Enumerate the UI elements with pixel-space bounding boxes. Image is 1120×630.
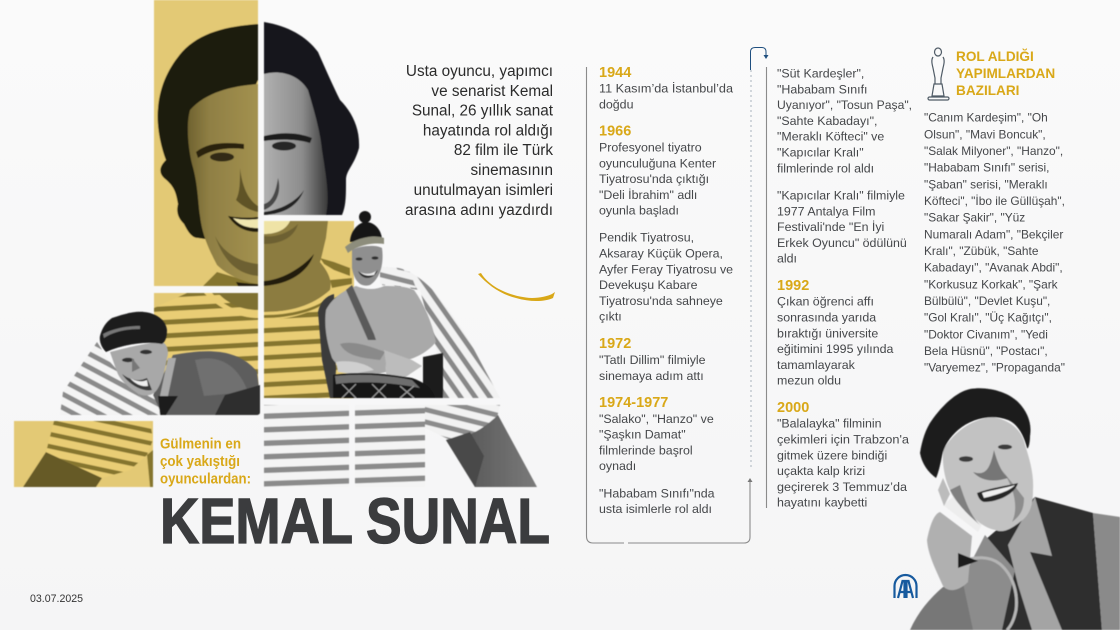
- timeline column 1: Ayfer Feray Tiyatrosu ve: [599, 262, 733, 276]
- subtitle: Gülmenin en: [160, 436, 241, 452]
- timeline column 2: uçakta kalp krizi: [777, 464, 865, 478]
- intro text: Sunal, 26 yıllık sanat: [412, 102, 554, 120]
- timeline column 1: 1944: [599, 65, 631, 81]
- subtitle: oyunculardan:: [160, 472, 251, 488]
- main title: SUNAL: [366, 485, 550, 557]
- heading: roles: [956, 49, 1055, 98]
- smile swoosh: [478, 273, 555, 301]
- timeline column 2: Uyanıyor", "Tosun Paşa",: [777, 98, 912, 112]
- intro text: sinemasının: [471, 162, 553, 179]
- panel: yellow lower-left striped shirt: [154, 293, 258, 405]
- timeline column 2: hayatını kaybetti: [777, 496, 867, 510]
- timeline column 2: tamamlayarak: [777, 358, 856, 372]
- timeline column 2: 2000: [777, 400, 809, 416]
- timeline column 1: "Salako", "Hanzo" ve: [599, 412, 714, 426]
- intro text: hayatında rol aldığı: [423, 122, 553, 140]
- date: 03.07.2025: [30, 593, 83, 605]
- list of films: Köfteci", "İbo ile Güllüşah",: [924, 194, 1065, 208]
- timeline column 1: usta isimlerle rol aldı: [599, 502, 712, 516]
- list of films: Numaralı Adam", "Bekçiler: [924, 228, 1063, 242]
- list of films: "Salak Milyoner", "Hanzo",: [924, 144, 1063, 158]
- heading: roles: ROL ALDIĞI: [956, 49, 1034, 64]
- timeline column 1: oyunla başladı: [599, 204, 679, 218]
- panel: grey portrait half: [264, 22, 359, 215]
- intro text: [405, 63, 554, 219]
- timeline column 1: Tiyatrosu'nda sahneye: [599, 294, 723, 308]
- intro text: unutulmayan isimleri: [414, 182, 553, 199]
- timeline column 2: aldı: [777, 252, 797, 266]
- timeline column 1: "Şaşkın Damat": [599, 428, 686, 442]
- shirt: grey stripes, lower panels and arm: [264, 405, 537, 487]
- timeline column 2: "Balalayka" filminin: [777, 416, 882, 430]
- icon: film award statuette: [928, 48, 949, 100]
- heading: roles: YAPIMLARDAN: [956, 66, 1055, 81]
- timeline column 1: "Deli İbrahim" adlı: [599, 188, 697, 202]
- timeline column 1: doğdu: [599, 98, 634, 112]
- timeline column 2: 1992: [777, 278, 809, 294]
- portrait collage: [14, 0, 537, 487]
- list of films: Olsun", "Mavi Boncuk",: [924, 128, 1046, 142]
- list of films: Kralı", "Zübük, "Sahte: [924, 244, 1039, 258]
- timeline column 1: Profesyonel tiyatro: [599, 140, 702, 154]
- timeline column 1: oyunculuğuna Kenter: [599, 156, 716, 170]
- panel: yellow centre shirt: [264, 221, 354, 398]
- main title: [160, 485, 550, 557]
- timeline column 1: Aksaray Küçük Opera,: [599, 246, 723, 260]
- timeline column 2: "Süt Kardeşler",: [777, 66, 864, 80]
- photo: laughing man on telephone: [910, 388, 1120, 630]
- intro text: Usta oyuncu, yapımcı: [406, 63, 553, 80]
- timeline connector lines: [586, 48, 768, 543]
- panel: yellow upper-left portrait half: [154, 0, 258, 286]
- list of films: Bela Hüsnü", "Postacı",: [924, 344, 1048, 358]
- shirt: grey stripes, right sleeve: [380, 266, 500, 398]
- timeline column 1: [599, 65, 733, 516]
- intro text: arasına adını yazdırdı: [405, 202, 553, 219]
- photo: man in cap leaning on sleeve: [60, 312, 260, 415]
- timeline column 1: oynadı: [599, 459, 636, 473]
- timeline column 2: "Kapıcılar Kralı" filmiyle: [777, 188, 905, 202]
- timeline column 1: Tiyatrosu'nda çıktığı: [599, 172, 709, 186]
- timeline column 2: gitmek üzere bindiği: [777, 448, 887, 462]
- list of films: "Varyemez", "Propaganda": [924, 360, 1065, 374]
- timeline column 2: "Kapıcılar Kralı": [777, 146, 864, 160]
- timeline column 1: Pendik Tiyatrosu,: [599, 230, 694, 244]
- list of films: Kabadayı", "Avanak Abdi",: [924, 260, 1063, 274]
- list of films: "Şaban" serisi, "Meraklı: [924, 178, 1048, 192]
- main title: KEMAL: [160, 485, 353, 557]
- timeline column 2: [777, 66, 912, 510]
- subtitle: [160, 436, 251, 488]
- timeline column 1: 11 Kasım’da İstanbul’da: [599, 82, 733, 96]
- intro text: 82 film ile Türk: [454, 142, 553, 159]
- timeline column 1: "Hababam Sınıfı"nda: [599, 486, 715, 500]
- timeline column 1: sinemaya adım attı: [599, 369, 704, 383]
- timeline column 2: Erkek Oyuncu" ödülünü: [777, 236, 907, 250]
- timeline column 2: "Meraklı Köfteci" ve: [777, 130, 884, 144]
- timeline column 1: 1974-1977: [599, 395, 668, 411]
- timeline column 2: Festivali'nde "En İyi: [777, 220, 884, 234]
- list of films: "Hababam Sınıfı" serisi,: [924, 160, 1049, 174]
- timeline column 1: filmlerinde başrol: [599, 444, 693, 458]
- heading: roles: BAZILARI: [956, 83, 1019, 98]
- timeline column 1: "Tatlı Dillim" filmiyle: [599, 353, 706, 367]
- list of films: "Korkusuz Korkak", "Şark: [924, 278, 1058, 292]
- timeline column 2: bıraktığı üniversite: [777, 326, 878, 340]
- timeline column 2: Çıkan öğrenci affı: [777, 294, 874, 308]
- timeline column 2: "Sahte Kabadayı",: [777, 114, 877, 128]
- timeline column 2: 1977 Antalya Film: [777, 204, 876, 218]
- photo: seated man with bobble hat: [318, 211, 443, 398]
- timeline column 1: çıktı: [599, 310, 622, 324]
- list of films: Bülbülü", "Devlet Kuşu",: [924, 294, 1050, 308]
- timeline column 2: filmlerinde rol aldı: [777, 162, 874, 176]
- list of films: [924, 110, 1065, 374]
- subtitle: çok yakıştığı: [160, 454, 240, 470]
- timeline column 2: geçirerek 3 Temmuz’da: [777, 480, 907, 494]
- panel: bottom-left sleeve: [14, 421, 153, 487]
- timeline column 2: çekimleri için Trabzon'a: [777, 432, 909, 446]
- timeline column 2: sonrasında yarıda: [777, 310, 876, 324]
- list of films: "Canım Kardeşim", "Oh: [924, 110, 1048, 124]
- list of films: "Sakar Şakir", "Yüz: [924, 210, 1025, 224]
- icon: AA logo: [894, 575, 916, 598]
- intro text: ve senarist Kemal: [431, 83, 553, 100]
- list of films: "Gol Kralı", "Üç Kağıtçı",: [924, 310, 1052, 324]
- timeline column 1: 1966: [599, 124, 631, 140]
- timeline column 2: "Hababam Sınıfı: [777, 82, 868, 96]
- timeline column 2: eğitimini 1995 yılında: [777, 342, 894, 356]
- timeline column 1: 1972: [599, 336, 631, 352]
- timeline column 2: mezun oldu: [777, 374, 841, 388]
- list of films: "Doktor Civanım", "Yedi: [924, 328, 1048, 342]
- timeline column 1: Devekuşu Kabare: [599, 278, 698, 292]
